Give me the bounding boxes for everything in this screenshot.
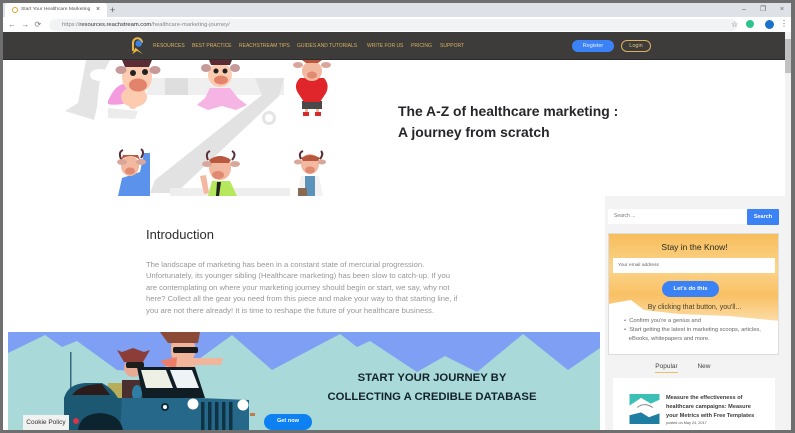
window controls: × [780, 6, 784, 13]
letter Z [150, 78, 284, 193]
popular tab: Popular [655, 363, 678, 370]
cow: sitting baby [197, 60, 247, 110]
new tab button: + [110, 5, 115, 15]
mountains background [8, 332, 600, 372]
antenna [70, 352, 72, 398]
navigation links: BEST PRACTICE [192, 43, 232, 49]
benefits list [624, 318, 761, 342]
site navigation bar [3, 32, 785, 60]
article card [613, 378, 775, 430]
sidebar panel [605, 196, 785, 430]
article date: posted on May 24, 2017 [666, 421, 707, 425]
article title: Measure the effectiveness of [666, 395, 742, 401]
active tab: × [96, 6, 100, 13]
bumper [250, 413, 255, 416]
cow: green shirt [200, 151, 240, 196]
driver cow [160, 332, 223, 395]
promotional banner [8, 332, 600, 430]
passenger cow [108, 348, 150, 412]
article thumbnail [630, 394, 660, 424]
login button: Login [629, 43, 643, 49]
benefits list: • Start getting the latest in marketing scoops, articles, [624, 327, 761, 333]
email input [613, 258, 775, 273]
hero title: A journey from scratch [398, 124, 550, 140]
cow: blue shirt raising arm [117, 149, 150, 196]
get now button [264, 414, 312, 430]
newsletter card [608, 233, 779, 355]
cookie policy badge: Cookie Policy [26, 419, 66, 426]
search input [608, 209, 750, 224]
cookie policy badge [23, 415, 69, 430]
tab favicon [12, 7, 18, 13]
article title [666, 395, 754, 419]
navigation links: RESOURCES [153, 43, 185, 49]
active tab: Start Your Healthcare Marketing [21, 7, 90, 12]
benefits list: • Confirm you're a genius and [624, 318, 701, 324]
call to action button: Let's do this [674, 286, 707, 292]
banner headline: COLLECTING A CREDIBLE DATABASE [328, 390, 536, 402]
scrollbar [785, 32, 791, 430]
window controls: ❐ [760, 6, 766, 13]
login button [621, 40, 651, 52]
active tab [5, 3, 107, 17]
register button: Register [583, 43, 603, 49]
icon: green extension [746, 20, 754, 28]
introduction paragraph: Unfortunately, its younger sibling (Healthcare marketing) has been slow to catch-up. If you [146, 271, 450, 280]
introduction paragraph: are contemplating on where your marketing journey should begin or start, we say, why not [146, 283, 450, 292]
jeep illustration [64, 332, 255, 430]
browser tab strip [3, 3, 791, 17]
letter A [65, 60, 138, 120]
banner headline: START YOUR JOURNEY BY [358, 372, 506, 384]
popular tab [655, 362, 678, 373]
address bar [49, 19, 737, 31]
hood and grille [120, 398, 249, 430]
wheel [78, 413, 123, 430]
navigation buttons: ← → ⟳ [8, 20, 41, 29]
cow: red hoodie [293, 60, 331, 116]
register button [572, 40, 614, 52]
banner headline [328, 372, 536, 402]
hero title: The A-Z of healthcare marketing : [398, 103, 618, 119]
hero illustration [65, 60, 331, 196]
article title: your Metrics with Free Templates [666, 413, 754, 419]
search button: Search [754, 214, 772, 220]
watercolor background [609, 234, 778, 321]
icon: gear [264, 112, 274, 124]
window controls [742, 6, 784, 13]
navigation links: REACHSTREAM TIPS [239, 43, 290, 49]
cow: crawling baby [108, 60, 160, 109]
address bar: https://resources.reachstream.com/healthcare-marketing-journey/ [62, 22, 230, 28]
scrollbar thumb [785, 39, 791, 73]
headlights [162, 398, 248, 410]
email input: Your email address [618, 263, 659, 268]
get now button: Get now [277, 418, 299, 424]
icon: star: ☆ [731, 20, 738, 29]
windshield [137, 367, 205, 398]
new tab: New [697, 363, 710, 370]
introduction paragraph: you are not there already! It is time to reshape the future of your healthcare business. [146, 306, 434, 315]
navigation links: PRICING [411, 43, 432, 49]
address toolbar [3, 17, 791, 32]
icon: menu dots: ⋮ [780, 19, 788, 28]
introduction paragraph [146, 260, 458, 315]
introduction paragraph: The landscape of marketing has been in a constant state of mercurial progression. [146, 260, 424, 269]
red reflector [73, 418, 79, 424]
spare tire and rear body [64, 383, 130, 430]
introduction paragraph: here? Collect all the gear you need from this piece and make your way to that starting line, if [146, 294, 457, 303]
navigation links: WRITE FOR US [367, 43, 403, 49]
top bar [147, 78, 284, 95]
search input: Search ... [614, 213, 635, 219]
icon: site logo [132, 37, 143, 54]
cow: doctor [294, 151, 326, 196]
navigation links: SUPPORT [440, 43, 464, 49]
Z bottom bar [170, 188, 290, 196]
hero title [398, 103, 618, 140]
call to action button [662, 281, 719, 297]
article title: healthcare campaigns: Measure [666, 404, 751, 410]
navigation links [153, 43, 464, 49]
icon: profile [765, 20, 774, 29]
benefits list: eBooks, whitepapers and more. [629, 336, 710, 342]
search button [747, 209, 779, 225]
navigation links: GUIDES AND TUTORIALS [297, 43, 357, 49]
toolbar icons [731, 19, 788, 29]
clicking note: By clicking that button, you'll... [648, 304, 741, 311]
window controls: – [742, 6, 746, 13]
introduction heading: Introduction [146, 227, 214, 242]
newsletter heading: Stay in the Know! [661, 242, 728, 252]
